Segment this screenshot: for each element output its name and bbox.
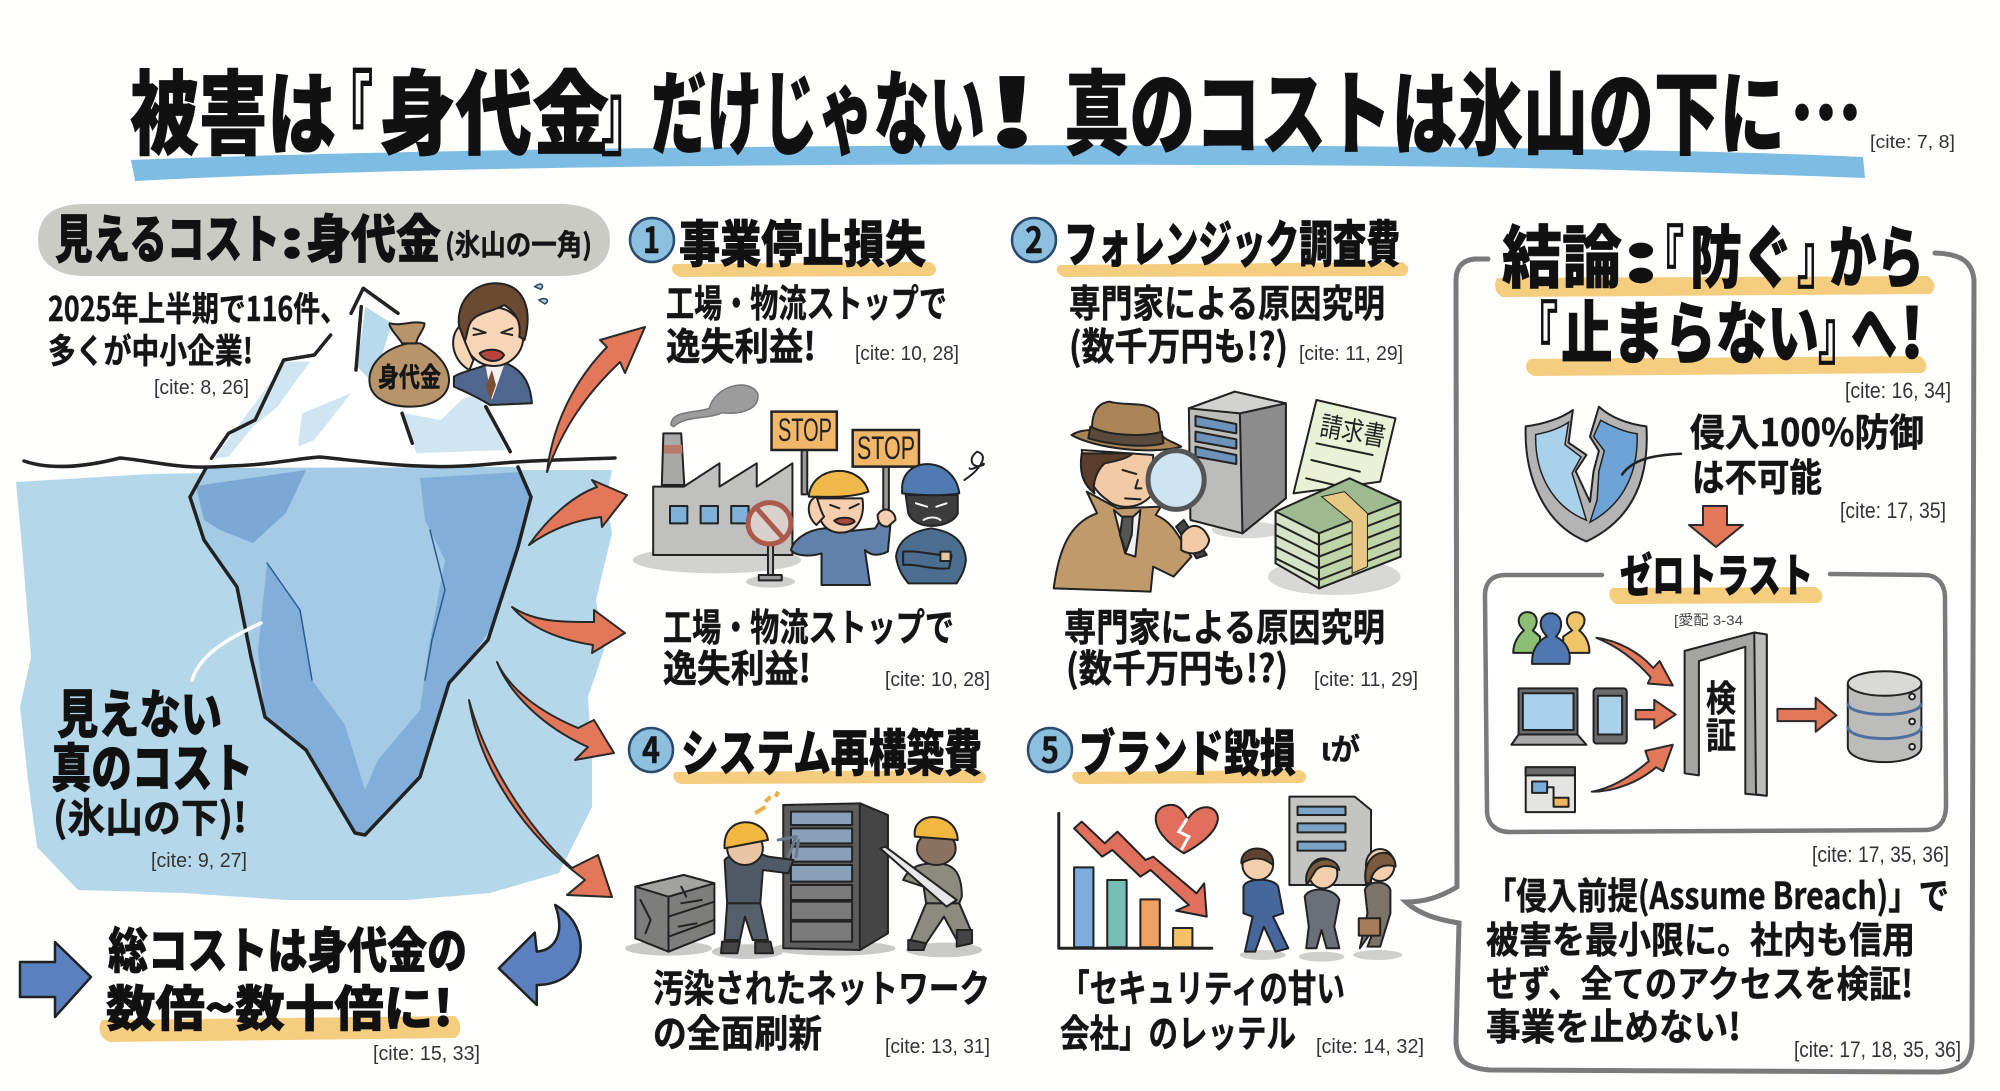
text 4	[653, 958, 990, 1058]
heading 1: 1	[643, 212, 660, 264]
text 1 top	[666, 273, 959, 371]
callout: total cost: 数倍~数十倍に!	[106, 970, 453, 1041]
text: 100% defense impossible: [cite: 17, 35]	[1840, 498, 1946, 523]
heading 2: フォレンジック調査費	[1064, 205, 1400, 277]
conclusion heading: 防ぐ	[1690, 203, 1794, 302]
text 1 bottom: 逸失利益!	[663, 638, 811, 693]
arrows from iceberg to cost items	[469, 327, 645, 897]
water line	[24, 457, 615, 467]
worker with blue helmet	[896, 464, 966, 583]
text 1 top: 工場・物流ストップで	[666, 273, 947, 328]
text: invisible true cost: 見えない	[57, 673, 222, 748]
iceberg above water	[210, 288, 512, 460]
conclusion heading: !	[1900, 279, 1924, 378]
title: 』	[601, 41, 651, 174]
callout: total cost: [cite: 15, 33]	[373, 1043, 480, 1065]
text 2 bottom	[1064, 597, 1418, 693]
conclusion heading: 結論	[1502, 203, 1622, 302]
panel: conclusion	[1406, 203, 1974, 1072]
panel: item 1 business interruption	[630, 205, 990, 693]
text 2 top	[1069, 273, 1403, 371]
conclusion heading: から	[1829, 203, 1924, 302]
speech bubble frame	[1406, 253, 1974, 1072]
icon: blue right arrow	[20, 942, 91, 1017]
text: invisible true cost	[51, 673, 253, 872]
panel: item 2 forensics	[1012, 205, 1418, 693]
text 2 bottom: 専門家による原因究明	[1064, 597, 1385, 652]
text: 2025 stats: 多くが中小企業!	[48, 324, 253, 373]
illustration: declining chart, broken heart, leaving staff	[1059, 797, 1402, 962]
heading: visible cost	[38, 198, 610, 276]
text 1 top: [cite: 10, 28]	[855, 343, 959, 365]
text 2 top: (数千万円も!?)	[1069, 316, 1288, 371]
icon: tablet	[1594, 688, 1627, 744]
text: invisible true cost: [cite: 9, 27]	[151, 850, 247, 872]
citation: [cite: 17, 35, 36]	[1812, 842, 1949, 867]
title: 被害は	[130, 41, 336, 174]
text 1 bottom	[663, 597, 990, 693]
text 5	[1060, 958, 1424, 1058]
text 1 bottom: 工場・物流ストップで	[663, 597, 954, 652]
text 2 top: 専門家による原因究明	[1069, 273, 1385, 328]
heading 5: ブランド毀損	[1079, 714, 1296, 786]
icon: verification gate	[1685, 632, 1767, 796]
text: invisible true cost: 真のコスト	[51, 727, 253, 802]
text: assume breach	[1486, 866, 1961, 1062]
invoice label: 請求書	[1318, 411, 1388, 452]
icon: database	[1848, 671, 1921, 762]
panel: iceberg	[16, 283, 615, 900]
gate label: 証	[1706, 707, 1736, 759]
title: 身代金	[379, 41, 609, 174]
heading 1: 事業停止損失	[679, 205, 926, 277]
heading 5: ιが	[1321, 725, 1360, 769]
panel: zero trust	[1485, 540, 1946, 832]
heading 5: 5	[1041, 722, 1059, 774]
illustration: factory and workers	[633, 385, 984, 588]
arrows into gate	[1592, 638, 1836, 792]
gate label	[1706, 670, 1736, 759]
illustration: detective, server, invoice, money	[1054, 392, 1401, 595]
worker with yellow helmet	[791, 471, 896, 585]
icon: money bag	[369, 322, 449, 407]
conclusion heading: 』	[1797, 203, 1839, 302]
text 5: [cite: 14, 32]	[1316, 1036, 1424, 1058]
panel: item 4 system rebuild	[625, 714, 990, 1058]
leader line	[192, 623, 261, 680]
STOP signs: STOP	[857, 430, 915, 466]
heading: visible cost: :	[280, 198, 304, 273]
zero trust heading: [愛配 3-34	[1674, 612, 1743, 628]
conclusion heading	[1495, 203, 1951, 403]
text: assume breach: せず、全てのアクセスを検証!	[1486, 954, 1913, 1008]
text 4: [cite: 13, 31]	[885, 1036, 990, 1058]
heading 2: 2	[1025, 212, 1043, 264]
heading 4	[629, 714, 986, 786]
heading: visible cost: (氷山の一角)	[445, 222, 592, 264]
conclusion heading: 』	[1818, 279, 1860, 378]
conclusion heading: [cite: 16, 34]	[1845, 378, 1951, 403]
heading 4: 4	[642, 722, 660, 774]
text 2 bottom: (数千万円も!?)	[1066, 638, 1288, 693]
conclusion heading: 『	[1516, 279, 1558, 378]
diagram: users and devices through verification to data	[1511, 612, 1921, 812]
text 1 bottom: [cite: 10, 28]	[885, 669, 990, 691]
title: 『	[323, 41, 373, 174]
heading: visible cost: 見えるコスト	[55, 198, 280, 273]
title: !	[985, 41, 1039, 174]
panel: item 5 brand damage	[1028, 714, 1424, 1058]
water background	[16, 470, 612, 900]
zero trust heading: ゼロトラスト	[1620, 540, 1813, 606]
title: だけじゃない	[651, 41, 985, 174]
heading 4: システム再構築費	[681, 714, 982, 786]
zero trust heading	[1609, 540, 1822, 628]
text 4: 汚染されたネットワーク	[653, 958, 990, 1013]
callout: total cost	[100, 912, 480, 1065]
icon: users	[1513, 612, 1589, 664]
gate label: 検	[1706, 670, 1736, 722]
arrow: down to zero trust	[1689, 506, 1743, 547]
text 5: 「セキュリティの甘い	[1061, 958, 1345, 1013]
iceberg below water	[190, 467, 531, 835]
title: [cite: 7, 8]	[1870, 132, 1955, 152]
STOP signs: STOP	[778, 412, 832, 448]
title	[130, 41, 1955, 181]
text 5: 会社」のレッテル	[1060, 1003, 1296, 1058]
icon: blue curved arrow	[499, 905, 581, 1005]
heading 2	[1012, 205, 1408, 277]
icon: broken shield	[1526, 407, 1681, 541]
illustration: engineers rebuilding server	[625, 792, 982, 959]
text: 100% defense impossible	[1690, 402, 1946, 523]
money bag label: 身代金	[378, 356, 441, 395]
text: 100% defense impossible: は不可能	[1692, 447, 1822, 502]
icon: worried businessman	[453, 283, 547, 405]
conclusion heading: へ	[1851, 279, 1897, 378]
text: 2025 stats	[48, 282, 347, 399]
text: 100% defense impossible: 侵入100%防御	[1690, 402, 1924, 457]
callout: total cost: 総コストは身代金の	[108, 912, 467, 983]
conclusion heading: 止まらない	[1561, 279, 1819, 378]
zero trust frame	[1485, 574, 1946, 832]
conclusion heading: :	[1622, 203, 1660, 302]
text: 2025 stats: 2025年上半期で116件、	[48, 282, 347, 331]
text: assume breach: 被害を最小限に。社内も信用	[1486, 910, 1915, 964]
title: …	[1790, 41, 1862, 174]
icon: laptop	[1511, 688, 1586, 745]
text 1 top: 逸失利益!	[666, 316, 816, 371]
text 4: の全面刷新	[653, 1003, 822, 1058]
text 2 bottom: [cite: 11, 29]	[1314, 669, 1418, 691]
text: assume breach: [cite: 17, 18, 35, 36]	[1794, 1037, 1961, 1062]
text 2 top: [cite: 11, 29]	[1299, 343, 1403, 365]
STOP signs	[778, 412, 915, 466]
text: assume breach: 事業を止めない!	[1486, 997, 1741, 1051]
icon: app window	[1526, 767, 1575, 812]
heading: visible cost: 身代金	[306, 198, 441, 273]
conclusion heading: 『	[1642, 203, 1684, 302]
text: 2025 stats: [cite: 8, 26]	[154, 377, 249, 399]
text: invisible true cost: (氷山の下)!	[53, 786, 247, 844]
